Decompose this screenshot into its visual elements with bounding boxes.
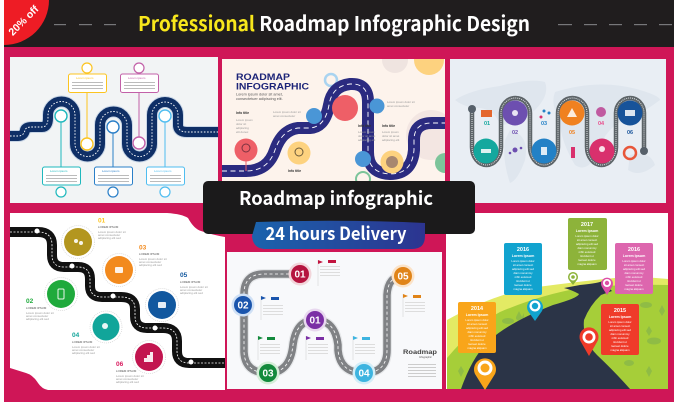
step text: adipiscing elit sed (180, 291, 203, 295)
year boxes: magna aliquam (513, 287, 533, 291)
step numbers: 02 (26, 298, 34, 305)
year boxes: 2015 (614, 308, 626, 314)
info text: adipiscing (236, 126, 249, 130)
road (472, 98, 644, 165)
numbered markers: 05 (397, 272, 409, 282)
step text: LOREM IPSUM (26, 306, 47, 310)
decorative circles (324, 59, 445, 181)
year boxes: magna aliquam (610, 348, 630, 352)
info titles: Info title (382, 124, 395, 128)
year boxes: nibh euismod (626, 275, 643, 279)
info text: amet consectetur (387, 104, 409, 108)
callout boxes: Lorem ipsum (102, 169, 120, 173)
step text: Lorem ipsum dolor sit (26, 311, 54, 315)
step text: Lorem ipsum dolor sit (116, 374, 144, 378)
heading (236, 74, 309, 90)
step labels: 02 (512, 130, 518, 136)
info text: Lorem ipsum dolor sit (273, 110, 301, 114)
year boxes: sit amet consect (513, 263, 533, 267)
year boxes: magna aliquam (577, 262, 597, 266)
discount badge (4, 0, 49, 45)
year boxes: sit amet consect (610, 324, 630, 328)
world map (455, 81, 660, 183)
panel: road with five stations (10, 57, 218, 203)
step text: LOREM IPSUM (72, 340, 93, 344)
info titles: Info title (288, 169, 301, 173)
year boxes: sit amet consect (577, 238, 597, 242)
year boxes: diam nonummy (624, 271, 644, 275)
year boxes: laoreet dolore (625, 283, 643, 287)
info titles: Info title (236, 111, 249, 115)
year boxes: laoreet dolore (578, 258, 596, 262)
icons (56, 63, 170, 197)
year boxes: tincidunt ut (470, 338, 484, 342)
title: Professional Roadmap Infographic Design (138, 7, 530, 37)
year boxes: diam nonummy (513, 271, 533, 275)
step text: adipiscing elit sed (139, 263, 162, 267)
heading: ROADMAP (236, 72, 291, 83)
numbered markers (232, 262, 414, 384)
step numbers: 01 (98, 218, 106, 224)
info text: adipiscing elit (382, 138, 400, 142)
step numbers: 04 (72, 332, 80, 339)
year boxes: laoreet dolore (468, 342, 486, 346)
step text: amet consectetur (116, 377, 138, 381)
year boxes: nibh euismod (612, 336, 629, 340)
info text: dolor sit amet (382, 134, 400, 138)
step text: adipiscing elit sed (116, 380, 139, 384)
step text: amet consectetur (139, 260, 161, 264)
info text: Lorem ipsum (236, 118, 253, 122)
roadmap caption: Roadmap (403, 349, 437, 356)
banner title: Roadmap infographic (239, 184, 433, 211)
year boxes: 2017 (581, 222, 593, 228)
map pins (34, 228, 194, 364)
roadmap caption: Infographic (419, 355, 433, 359)
year boxes: nibh euismod (579, 250, 596, 254)
step text: Lorem ipsum dolor sit (72, 345, 100, 349)
numbered markers: 02 (237, 300, 249, 312)
heading: INFOGRAPHIC (236, 82, 309, 92)
hills (447, 277, 668, 389)
numbered markers: 01 (294, 270, 306, 280)
map pins (474, 272, 613, 390)
year boxes: tincidunt ut (580, 254, 594, 258)
step text: LOREM IPSUM (116, 369, 137, 373)
year boxes: Lorem Ipsum (623, 254, 645, 258)
year boxes: 2016 (517, 247, 529, 253)
info text: dolor sit (236, 122, 246, 126)
small graphics (481, 107, 636, 159)
year boxes: tincidunt ut (613, 340, 627, 344)
blue delivery pill (252, 221, 425, 249)
step text: adipiscing elit sed (98, 236, 121, 240)
step numbers: 03 (139, 244, 147, 252)
year boxes: magna aliquam (624, 287, 644, 291)
step text: amet consectetur (180, 288, 202, 292)
callout boxes: Lorem ipsum (76, 76, 94, 80)
step text: LOREM IPSUM (139, 252, 160, 256)
discount badge: 20% off (6, 3, 42, 38)
step circles (474, 100, 642, 164)
step numbers (26, 218, 188, 368)
year boxes: Lorem ipsum dolor (622, 259, 646, 263)
step circles (44, 226, 178, 374)
step labels: 06 (627, 130, 633, 136)
numbered markers: 01 (309, 316, 321, 326)
delivery banner (203, 181, 475, 249)
year boxes: laoreet dolore (514, 283, 532, 287)
year boxes: nibh euismod (469, 334, 486, 338)
flag notes (258, 260, 425, 360)
year boxes: adipiscing elit sed (576, 242, 598, 246)
year boxes: diam nonummy (467, 330, 487, 334)
info text: Lorem ipsum (382, 130, 399, 134)
info titles: Info title (358, 124, 371, 128)
header bar (4, 0, 674, 47)
step text: LOREM IPSUM (98, 225, 119, 229)
road (461, 281, 630, 389)
info text: Lorem ipsum (358, 130, 375, 134)
info titles (236, 111, 395, 173)
year boxes: tincidunt ut (516, 279, 530, 283)
step numbers: 05 (180, 272, 188, 279)
step labels: 03 (541, 121, 547, 127)
info text: amet consectetur (273, 114, 295, 118)
year boxes: adipiscing elit sed (609, 328, 631, 332)
year boxes: adipiscing elit sed (466, 326, 488, 330)
year boxes: adipiscing elit sed (623, 267, 645, 271)
icon circles (234, 95, 404, 174)
road (244, 274, 403, 373)
panel: roadmap infographic blue road (222, 59, 445, 181)
intro text: Lorem ipsum dolor sit amet, (236, 92, 283, 96)
year boxes: magna aliquam (467, 346, 487, 350)
step text: Lorem ipsum dolor sit (180, 285, 208, 289)
road (10, 232, 225, 363)
year boxes: Lorem Ipsum (512, 254, 534, 258)
roadmap caption (403, 349, 437, 377)
station markers (55, 110, 171, 150)
step text: amet consectetur (26, 314, 48, 318)
year boxes: diam nonummy (610, 332, 630, 336)
callout boxes: Lorem ipsum (154, 169, 172, 173)
info text: Lorem ipsum dolor sit (387, 100, 415, 104)
year boxes: tincidunt ut (627, 279, 641, 283)
year boxes: laoreet dolore (611, 344, 629, 348)
intro text (236, 92, 283, 101)
delivery text: 24 hours Delivery (266, 220, 407, 246)
step text: adipiscing elit sed (72, 351, 95, 355)
step labels: 05 (569, 130, 575, 136)
year boxes: Lorem ipsum dolor (465, 318, 489, 322)
year boxes: Lorem Ipsum (576, 229, 598, 233)
step labels: 04 (598, 121, 605, 127)
road (10, 102, 218, 156)
year boxes (458, 218, 653, 355)
numbered markers: 04 (358, 368, 370, 380)
year boxes: Lorem ipsum dolor (608, 320, 632, 324)
callout boxes (42, 74, 184, 185)
panel: black diagonal road (10, 213, 225, 390)
step text: LOREM IPSUM (180, 280, 201, 284)
info text: dolor sit amet (358, 134, 376, 138)
year boxes: Lorem ipsum dolor (575, 234, 599, 238)
year boxes: sit amet consect (624, 263, 644, 267)
year boxes: sit amet consect (467, 322, 487, 326)
year boxes: Lorem Ipsum (466, 313, 488, 317)
year boxes: Lorem Ipsum (609, 315, 631, 319)
connectors (61, 93, 165, 167)
road (222, 84, 445, 174)
road end dots (468, 105, 648, 155)
numbered markers: 03 (262, 368, 274, 380)
year boxes: Lorem ipsum dolor (511, 259, 535, 263)
panel: gray road with flags (227, 252, 442, 389)
info text: adipiscing elit (358, 138, 376, 142)
step text: adipiscing elit sed (26, 317, 49, 321)
year boxes: diam nonummy (577, 246, 597, 250)
step labels (484, 121, 633, 136)
step text: Lorem ipsum dolor sit (139, 257, 167, 261)
step numbers: 06 (116, 361, 124, 368)
year boxes: nibh euismod (515, 275, 532, 279)
step text: Lorem ipsum dolor sit (98, 230, 126, 234)
step text: amet consectetur (72, 348, 94, 352)
year boxes: 2016 (628, 247, 640, 253)
callout boxes: Lorem ipsum (128, 76, 146, 80)
panel: world map roadmap (450, 59, 666, 203)
year boxes: 2014 (471, 306, 484, 312)
callout boxes: Lorem ipsum (50, 169, 68, 173)
year boxes: adipiscing elit sed (512, 267, 534, 271)
step labels: 01 (484, 121, 490, 127)
info text: elit donec (236, 130, 249, 134)
step text (26, 225, 208, 384)
intro text: consectetuer adipiscing elit. (236, 97, 283, 101)
step text: amet consectetur (98, 233, 120, 237)
info text (236, 100, 415, 142)
panel: winding road landscape (446, 213, 668, 390)
